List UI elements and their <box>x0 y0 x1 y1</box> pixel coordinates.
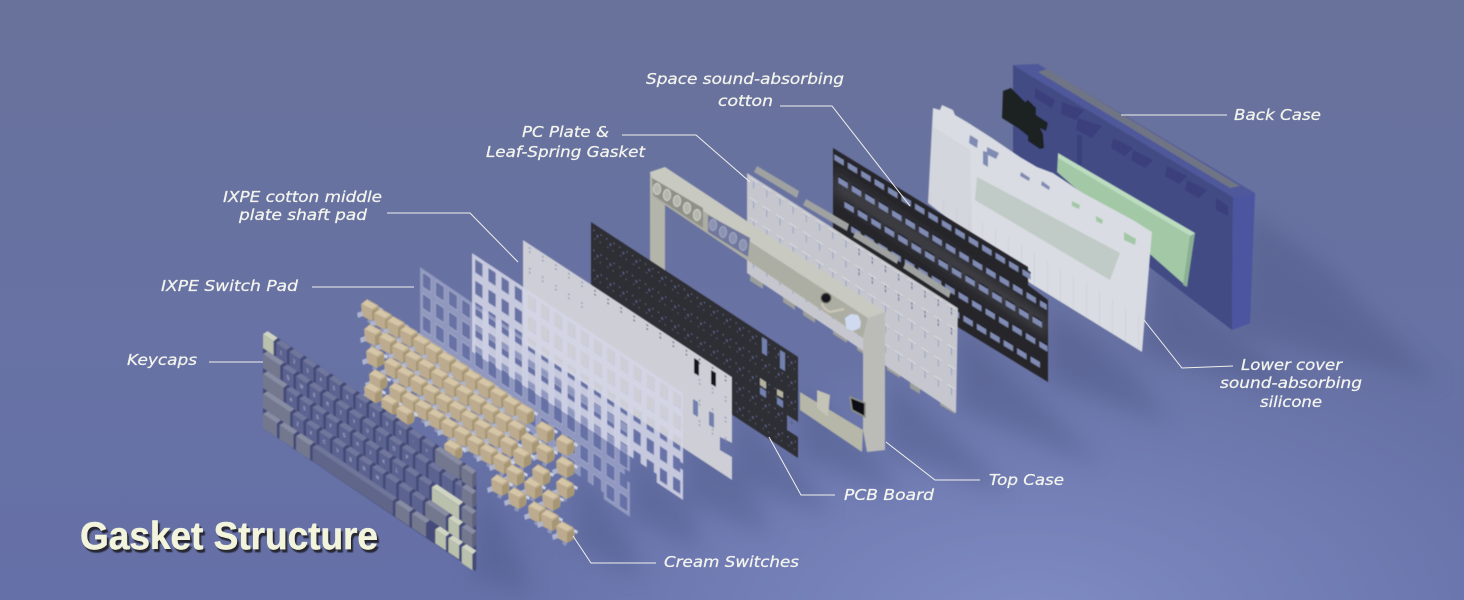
switch row 3 <box>362 346 578 502</box>
label: IXPE cotton middle plate shaft pad: IXPE cotton middle <box>223 188 382 206</box>
label: Top Case: Top Case <box>989 471 1064 489</box>
silicone body <box>928 105 1152 352</box>
label: Lower cover sound-absorbing silicone: sound-absorbing <box>1220 374 1362 392</box>
label: PC Plate & Leaf-Spring Gasket: PC Plate & <box>522 123 609 141</box>
layer: top case <box>650 167 885 452</box>
bar inner wall <box>652 178 868 338</box>
shaft pad black slots <box>694 358 716 387</box>
layer: PC plate and leaf-spring gasket <box>747 166 958 414</box>
label: Lower cover sound-absorbing silicone <box>1144 320 1362 411</box>
layer: cream switches <box>357 299 578 546</box>
light key tops <box>263 328 476 557</box>
PCB sheet <box>591 222 798 458</box>
label: Lower cover sound-absorbing silicone: silicone <box>1260 393 1322 411</box>
layer: white frame sheet <box>472 253 683 500</box>
gray dial row <box>653 184 701 220</box>
shaft pad dots <box>523 240 732 459</box>
label: IXPE cotton middle plate shaft pad <box>223 188 518 262</box>
switch row 5 <box>360 382 578 546</box>
title: Gasket Structure <box>80 515 378 558</box>
top case left column <box>650 172 665 290</box>
PCB solder clusters <box>591 222 798 457</box>
key legends <box>280 349 428 514</box>
layer: IXPE cotton middle plate shaft pad <box>523 240 732 480</box>
black port <box>850 397 865 417</box>
knob <box>845 314 861 331</box>
plate body <box>747 173 958 413</box>
jack socket <box>821 293 831 303</box>
layer: space sound-absorbing cotton <box>833 148 1048 382</box>
layer: lower cover silicone <box>928 104 1152 352</box>
label: Cream Switches <box>573 536 799 571</box>
switch row 1 <box>357 299 578 459</box>
back case top rim <box>1013 64 1255 197</box>
silicone green cutouts <box>1072 201 1136 245</box>
light key faces <box>263 334 472 570</box>
bottom gasket tabs <box>750 272 955 414</box>
plate marks <box>747 173 958 408</box>
silicone darker center band <box>975 177 1120 280</box>
interior ribs <box>1035 88 1228 216</box>
silicone ribs <box>930 192 1164 407</box>
gray key tops <box>263 328 476 557</box>
label: Lower cover sound-absorbing silicone: Lower cover <box>1241 356 1343 374</box>
gray button panel <box>652 178 703 228</box>
silicone left shade <box>928 125 972 235</box>
PCB small light windows <box>760 378 783 398</box>
back case gray strip <box>1038 69 1240 188</box>
metal wire <box>822 303 844 312</box>
label: Space sound-absorbing cotton <box>646 70 910 206</box>
switch row 4 <box>365 369 564 514</box>
bottom bar <box>800 392 863 452</box>
blue dial row <box>709 220 747 250</box>
label: Space sound-absorbing cotton: Space sound-absorbing <box>646 70 844 88</box>
label: IXPE cotton middle plate shaft pad: plate shaft pad <box>238 206 368 224</box>
layer: keycaps <box>263 328 476 573</box>
keycap base <box>263 328 476 572</box>
cotton slots <box>833 148 1047 382</box>
silicone cutouts <box>969 135 1050 190</box>
black bracket <box>1002 88 1048 149</box>
back case side wall <box>1232 193 1255 330</box>
back case interior <box>1013 65 1233 330</box>
label: Cream Switches: Cream Switches <box>664 553 799 571</box>
layer: PCB board <box>591 222 798 458</box>
label: Keycaps: Keycaps <box>127 351 197 369</box>
cotton sheen <box>833 172 1048 338</box>
floor shadows <box>473 210 1440 595</box>
top rim <box>650 167 885 318</box>
shaft pad blue slots <box>693 399 714 428</box>
layer: green sound pad <box>1057 153 1195 287</box>
blue button panel <box>708 215 750 257</box>
label: PC Plate & Leaf-Spring Gasket: Leaf-Spring Gasket <box>486 143 646 161</box>
case notch post <box>817 390 830 417</box>
label: Keycaps <box>127 351 263 369</box>
label: Top Case <box>886 442 1064 489</box>
right column <box>863 312 885 452</box>
gray key sides <box>459 459 476 551</box>
label: Space sound-absorbing cotton: cotton <box>718 92 773 110</box>
layer: back case <box>1002 64 1255 330</box>
layer: IXPE switch pad <box>420 267 630 517</box>
label: PCB Board: PCB Board <box>844 486 935 504</box>
gray key faces <box>263 334 472 568</box>
cotton sheet <box>833 148 1048 382</box>
label: PCB Board <box>769 437 935 504</box>
alpha keys <box>276 337 462 541</box>
label: PC Plate & Leaf-Spring Gasket <box>486 123 750 182</box>
PCB cutouts <box>760 337 785 408</box>
shaft pad sheet <box>523 240 732 480</box>
label: IXPE Switch Pad: IXPE Switch Pad <box>161 277 299 295</box>
switch row 2 <box>360 324 578 481</box>
space bar <box>313 441 397 518</box>
label: Back Case: Back Case <box>1234 106 1321 124</box>
top gasket tabs <box>754 166 951 298</box>
